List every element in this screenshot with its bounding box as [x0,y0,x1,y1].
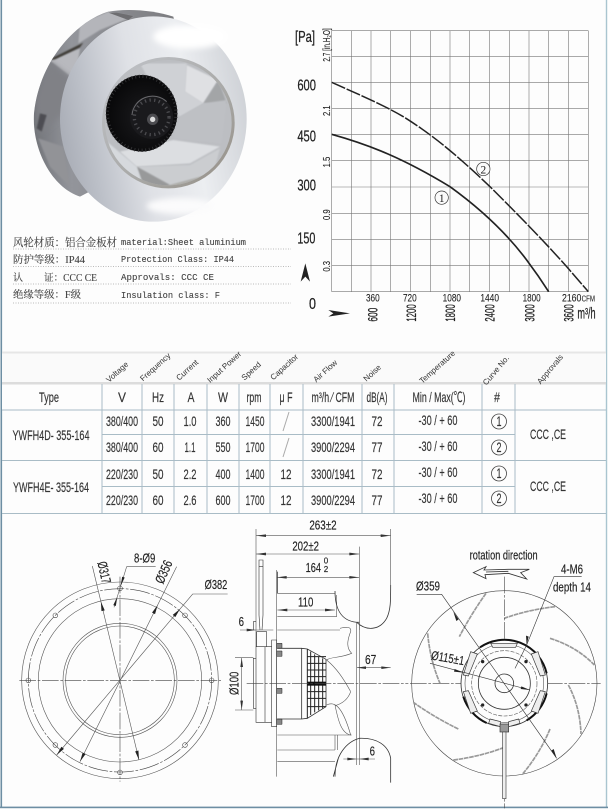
table row 1: -30 / + 60 [418,412,458,428]
table row 3: 50 [152,466,164,482]
table row 2 [106,438,458,455]
table row 3: 400 [216,466,231,482]
rotated column captions: Noise [362,363,383,383]
table row 3: 2.2 [184,466,197,482]
axis arrow right [328,310,350,317]
leader lines [57,566,228,762]
rotated column captions: Curve No. [481,354,511,387]
dimension labels: 2 [324,565,329,574]
flow axis labels in m3/h: 1800 [442,304,458,322]
labels: 4-M6 [561,563,583,577]
spec row: protection: Protection Class: IP44 [121,254,234,265]
rotated column captions [104,348,565,387]
spec row: approvals: Approvals: CCC CE [121,272,214,283]
curve 2 dashed [332,82,588,292]
pressure axis labels in Pa: 600 [297,78,316,95]
rotated column captions: Voltage [104,360,131,384]
table row 3: 12 [280,466,292,482]
table row 4: 3900/2294 [311,492,355,508]
leader lines [417,577,582,758]
flow axis labels in m3/h: 600 [364,308,380,322]
table row 4: 220/230 [106,492,138,508]
spec row: material: 风轮材质：铝合金板材 [13,235,117,249]
dimension labels: 6 [370,744,375,759]
flow axis labels in CFM: 2160 [562,292,581,304]
table row 4: 77 [372,492,383,508]
table row 2: 60 [152,439,164,455]
table column heads: dB(A) [366,389,388,405]
table row 1: 50 [152,413,164,429]
pressure axis labels in inH2O: 0.3 [322,261,333,272]
impeller back body [34,10,174,196]
model names [12,427,90,495]
flow axis labels in m3/h: 3000 [521,304,537,322]
flow axis labels in CFM: CFM [582,294,595,303]
rotated column captions: Frequency [138,351,172,383]
flow axis labels in m3/h: m³/h [577,306,596,323]
curve 1 solid [332,134,549,292]
dimension labels: Ø317 [94,560,114,585]
spec row: insulation [13,288,291,303]
curve number badges: 1 [496,413,502,429]
rotated column captions: Input Power [205,349,243,385]
labels: Ø115±1 [430,648,465,668]
table row 3 [106,464,458,482]
rotated column captions: Air Flow [312,358,339,384]
spec row: material: material:Sheet aluminium [121,237,246,248]
table row 3: -30 / + 60 [418,464,458,480]
impeller opening and blades [106,60,232,186]
table column heads: m³/h ∕ CFM [312,389,354,405]
table row 2: 550 [216,439,231,455]
dimension labels [226,518,376,759]
curve number badges [492,413,506,506]
dimension labels: 202±2 [292,538,319,553]
dimension lines [235,529,391,777]
impeller section outline [277,572,391,783]
drawing: rear motor view [410,548,601,808]
rotated column captions: Approvals [535,353,565,386]
pressure axis labels in inH2O: 1.5 [322,157,333,167]
flow axis labels in CFM: 360 [366,292,380,304]
impeller circle and blades [412,591,597,776]
curve number badges: 2 [496,490,502,506]
motor hub [106,75,177,152]
dimension labels: 110 [298,594,313,609]
chart grid [332,31,588,292]
concentric outlines [19,577,221,782]
labels: Ø359 [416,579,440,593]
flow axis labels in m3/h: 2400 [482,304,498,322]
table column heads: V [118,389,127,405]
table row 1: 1450 [246,413,265,429]
approvals cells [530,426,566,494]
pressure axis labels in inH2O: 2.1 [322,105,333,116]
labels: rotation direction [470,548,538,562]
table row 2: 1700 [246,439,265,455]
table row 3: 72 [372,466,383,482]
axis arrow up [301,263,310,282]
dimension labels: Ø356 [152,558,176,586]
spec row: protection [13,253,291,266]
rotation direction arrow [473,567,529,579]
table column heads: Type [39,389,59,405]
table row 1 [106,412,458,429]
table column heads: rpm [246,389,262,405]
pressure axis labels in Pa: [Pa] [295,29,315,46]
table row 2: 1.1 [184,439,196,455]
specification table [2,348,606,514]
flow axis labels in m3/h: 3600 [560,304,576,322]
terminal box and cable [253,560,282,727]
spec row: insulation: Insulation class: F [121,290,220,301]
table row 4: 600 [216,492,231,508]
dimension labels: 67 [365,652,376,667]
dimension labels: Ø382 [205,577,227,592]
table row 1: 72 [372,413,383,429]
dimension labels: 263±2 [309,518,337,533]
motor rear rings [461,640,548,727]
table row 4: -30 / + 60 [418,490,458,506]
drawing: front mounting view [19,550,228,782]
flow axis labels in CFM: 1080 [443,292,461,304]
table row 1: 1.0 [184,413,197,429]
labels [416,548,591,668]
pressure axis labels in inH2O: 2.7 [in.H₂O] [322,28,333,62]
curve number badges: 1 [496,465,502,481]
dimension labels [94,550,227,592]
capacitor not applicable slashes [283,412,289,457]
flow axis labels in CFM: 720 [403,292,417,304]
pressure axis labels in Pa: 450 [297,128,316,145]
table rules [2,384,606,514]
table column heads [39,389,500,405]
spec row: material [13,235,291,249]
table row 4: 2.6 [184,492,197,508]
centre lines [410,577,601,808]
motor body with fins [277,648,326,719]
pressure axis labels in Pa [295,29,316,313]
drawing: side section view [226,518,408,783]
rotated column captions: Capacitor [269,352,300,382]
flow axis labels in CFM: 1800 [523,292,541,304]
table column heads: μ F [280,389,292,405]
centre line [247,682,408,684]
rotated column captions: Temperature [418,348,457,386]
table row 1: 360 [216,413,231,429]
spec row: protection: 防护等级：IP44 [13,253,85,266]
table row 2: -30 / + 60 [418,438,458,454]
table row 2: 3900/2294 [311,439,355,455]
table row 1: 380/400 [106,413,138,429]
dimension labels: 164 [306,560,321,575]
flow axis labels in m3/h: 1200 [403,304,419,322]
table row 3: 220/230 [106,466,138,482]
rotated column captions: Current [174,357,201,382]
table column heads: Min / Max(℃) [412,389,466,405]
table column heads: W [218,389,229,405]
table row 4: 60 [152,492,164,508]
labels: depth 14 [553,581,591,595]
spec row: approvals: 证：CCC CE [44,272,97,284]
spec row: approvals: 认 [13,271,23,284]
curve number badges: 2 [496,439,502,455]
table row 2: 380/400 [106,439,138,455]
curve label 2: 2 [480,164,486,176]
table row 4: 12 [280,492,292,508]
specification list [13,235,291,303]
model names: YWFH4E- 355-164 [13,479,89,495]
curve label 1 [435,191,448,205]
table row 4 [106,490,458,508]
flow axis labels in CFM [366,292,595,304]
dimension labels: Ø100 [226,672,241,695]
photo: centrifugal impeller [30,7,247,222]
model names: YWFH4D- 355-164 [12,427,90,443]
table row 4: 1700 [246,492,265,508]
spec row: approvals [13,271,291,284]
pressure axis labels in Pa: 150 [297,230,315,247]
approvals cells: CCC ,CE [530,478,566,494]
flow axis labels in CFM: 1440 [480,292,499,304]
cable [500,724,509,799]
approvals cells: CCC ,CE [530,426,566,442]
table row 3: 1400 [246,466,265,482]
table column heads: A [188,389,195,405]
rotated column captions: Speed [240,360,263,382]
table row 3: 3300/1941 [311,466,355,482]
pressure axis labels in inH2O: 0.9 [322,209,333,220]
pressure axis labels in inH2O [322,28,333,272]
curve label 1: 1 [439,193,445,205]
table row 1: 3300/1941 [311,413,355,429]
table column heads: Hz [152,389,164,405]
table column heads: # [494,389,500,405]
table row 2: 77 [372,439,383,455]
flow axis labels in m3/h [364,304,596,323]
table header band [2,352,606,410]
pressure axis labels in Pa: 300 [297,178,316,195]
spec row: insulation: 绝缘等级：F级 [13,288,81,301]
curve label 2 [477,162,490,176]
impeller front ring [60,16,247,222]
dimension labels: 6 [239,614,244,629]
mounting holes [26,586,214,775]
dimension labels: 0 [324,557,329,566]
pressure axis labels in Pa: 0 [309,296,316,313]
performance chart [295,28,596,323]
dimension labels: 8-Ø9 [134,550,155,565]
